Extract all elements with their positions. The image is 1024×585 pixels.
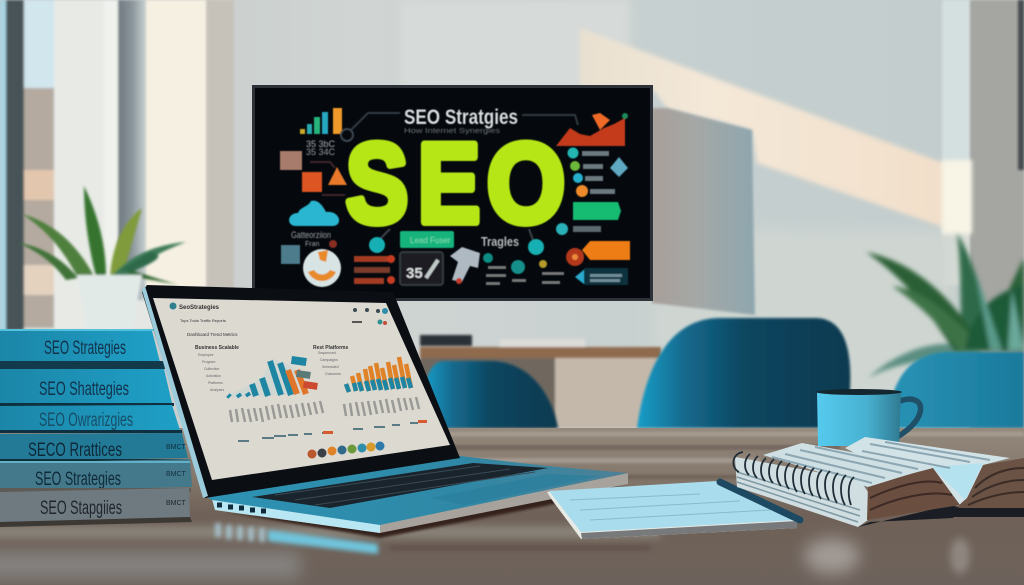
- book 6: BMCT: [166, 500, 187, 507]
- left icons: Gatteorziion: [291, 230, 331, 240]
- number card: 35: [406, 265, 423, 282]
- book 3: SEO Owrarizgies: [39, 410, 133, 431]
- chart 1: traffic: Employee: [198, 353, 214, 357]
- brown page edges: [867, 468, 960, 520]
- red list block: [354, 255, 395, 284]
- mini bar chart icon: 35 3bC: [306, 139, 336, 149]
- chart 2: traffic: Rest Platforms: [313, 345, 349, 351]
- laptop lid: [142, 285, 460, 498]
- TV shadow on the wall: [652, 108, 755, 315]
- chart 1: traffic: Analyses: [210, 388, 224, 392]
- SEO big letters: [346, 121, 565, 246]
- laptop: [142, 285, 628, 533]
- pen: [720, 482, 800, 520]
- dashboard header: Dashboard Trend Metrics: [187, 332, 238, 337]
- gear and wrench icon: [450, 247, 480, 284]
- book 2: SEO Shattegies: [39, 379, 129, 400]
- icon row: [308, 442, 384, 458]
- mini bar chart icon: 35 34C: [306, 147, 336, 157]
- wire coil: [733, 452, 854, 505]
- mug: [816, 389, 921, 446]
- chart 1: traffic: Collection: [204, 367, 219, 371]
- dashboard header: Tops Tools Traffic Reports: [180, 318, 226, 323]
- orange callouts: [566, 241, 630, 285]
- TV screen: [252, 85, 653, 301]
- book 6: SEO Stapgiies: [40, 498, 122, 519]
- dashboard header: [170, 302, 388, 337]
- TV title: [404, 106, 518, 135]
- book 2: [0, 369, 172, 405]
- book 4: BMCT: [166, 444, 187, 451]
- book 5: BMCT: [166, 471, 187, 478]
- SEO big letters: E: [418, 121, 480, 246]
- book 4: [0, 433, 188, 461]
- laptop reflection: [268, 530, 378, 554]
- left top page: [763, 443, 933, 487]
- plant on the window sill: [18, 186, 186, 329]
- open right page stack: [845, 437, 1024, 517]
- plant on the right: [866, 233, 1024, 378]
- chart 1: traffic: [195, 345, 333, 441]
- chart 1: traffic: Platforms: [208, 381, 223, 385]
- chart 2: traffic: [313, 345, 427, 429]
- chart 2: traffic: Scheduled: [322, 365, 339, 369]
- small teal list: [483, 253, 564, 285]
- laptop screen: [153, 298, 450, 480]
- book stack: [0, 329, 192, 527]
- window on the left: [0, 0, 254, 330]
- TV title: How Internet Synergies: [404, 128, 501, 135]
- chart 2: traffic: Campaigns: [320, 358, 338, 362]
- sunlight patch: [580, 28, 972, 234]
- plant pot: [77, 275, 142, 329]
- chart 2: traffic: Outcomes: [325, 372, 341, 376]
- book 3: [0, 405, 180, 431]
- globe icon: [303, 249, 341, 287]
- chart 1: traffic: Business Scalable: [195, 345, 239, 351]
- notepad with pen: [547, 481, 800, 539]
- dark cover edge: [858, 505, 960, 527]
- back desk: [420, 335, 661, 428]
- book 6: [0, 488, 190, 522]
- chart 1: traffic: Program: [202, 360, 216, 364]
- spiral notebook: [733, 437, 1024, 527]
- SEO big letters: S: [346, 121, 408, 246]
- chair: center: [637, 318, 850, 428]
- connector dots bottom: Tragles: [481, 234, 519, 249]
- book 1: SEO Strategies: [44, 338, 126, 359]
- SEO big letters: O: [487, 121, 565, 246]
- book 5: [0, 459, 192, 491]
- number card: [400, 252, 443, 285]
- table top: [0, 428, 1024, 585]
- connector dots bottom: Lead Fuser: [410, 236, 451, 245]
- right icon list: [556, 148, 628, 235]
- book 1: [0, 329, 160, 362]
- mini bar chart icon: [300, 108, 578, 157]
- red area chart icon: [556, 113, 628, 146]
- laptop base: [205, 456, 628, 533]
- dashboard header: SeoStrategies: [179, 305, 220, 311]
- chair: right: [887, 352, 1024, 428]
- laptop shadow: [225, 486, 628, 538]
- wall background: [0, 0, 1024, 430]
- left icons: Fran: [305, 241, 320, 248]
- connector dots bottom: [369, 229, 544, 255]
- chair: back left: [423, 361, 558, 428]
- TV title: SEO Stratgies: [404, 106, 518, 129]
- book 5: SEO Strategies: [35, 469, 121, 490]
- book 4: SECO Rrattices: [28, 440, 122, 461]
- chart 2: traffic: Sequenced: [318, 351, 336, 355]
- chart 1: traffic: Activation: [206, 374, 221, 378]
- cloud icon: [289, 201, 339, 226]
- left icons: [280, 151, 347, 287]
- page block: [735, 457, 868, 527]
